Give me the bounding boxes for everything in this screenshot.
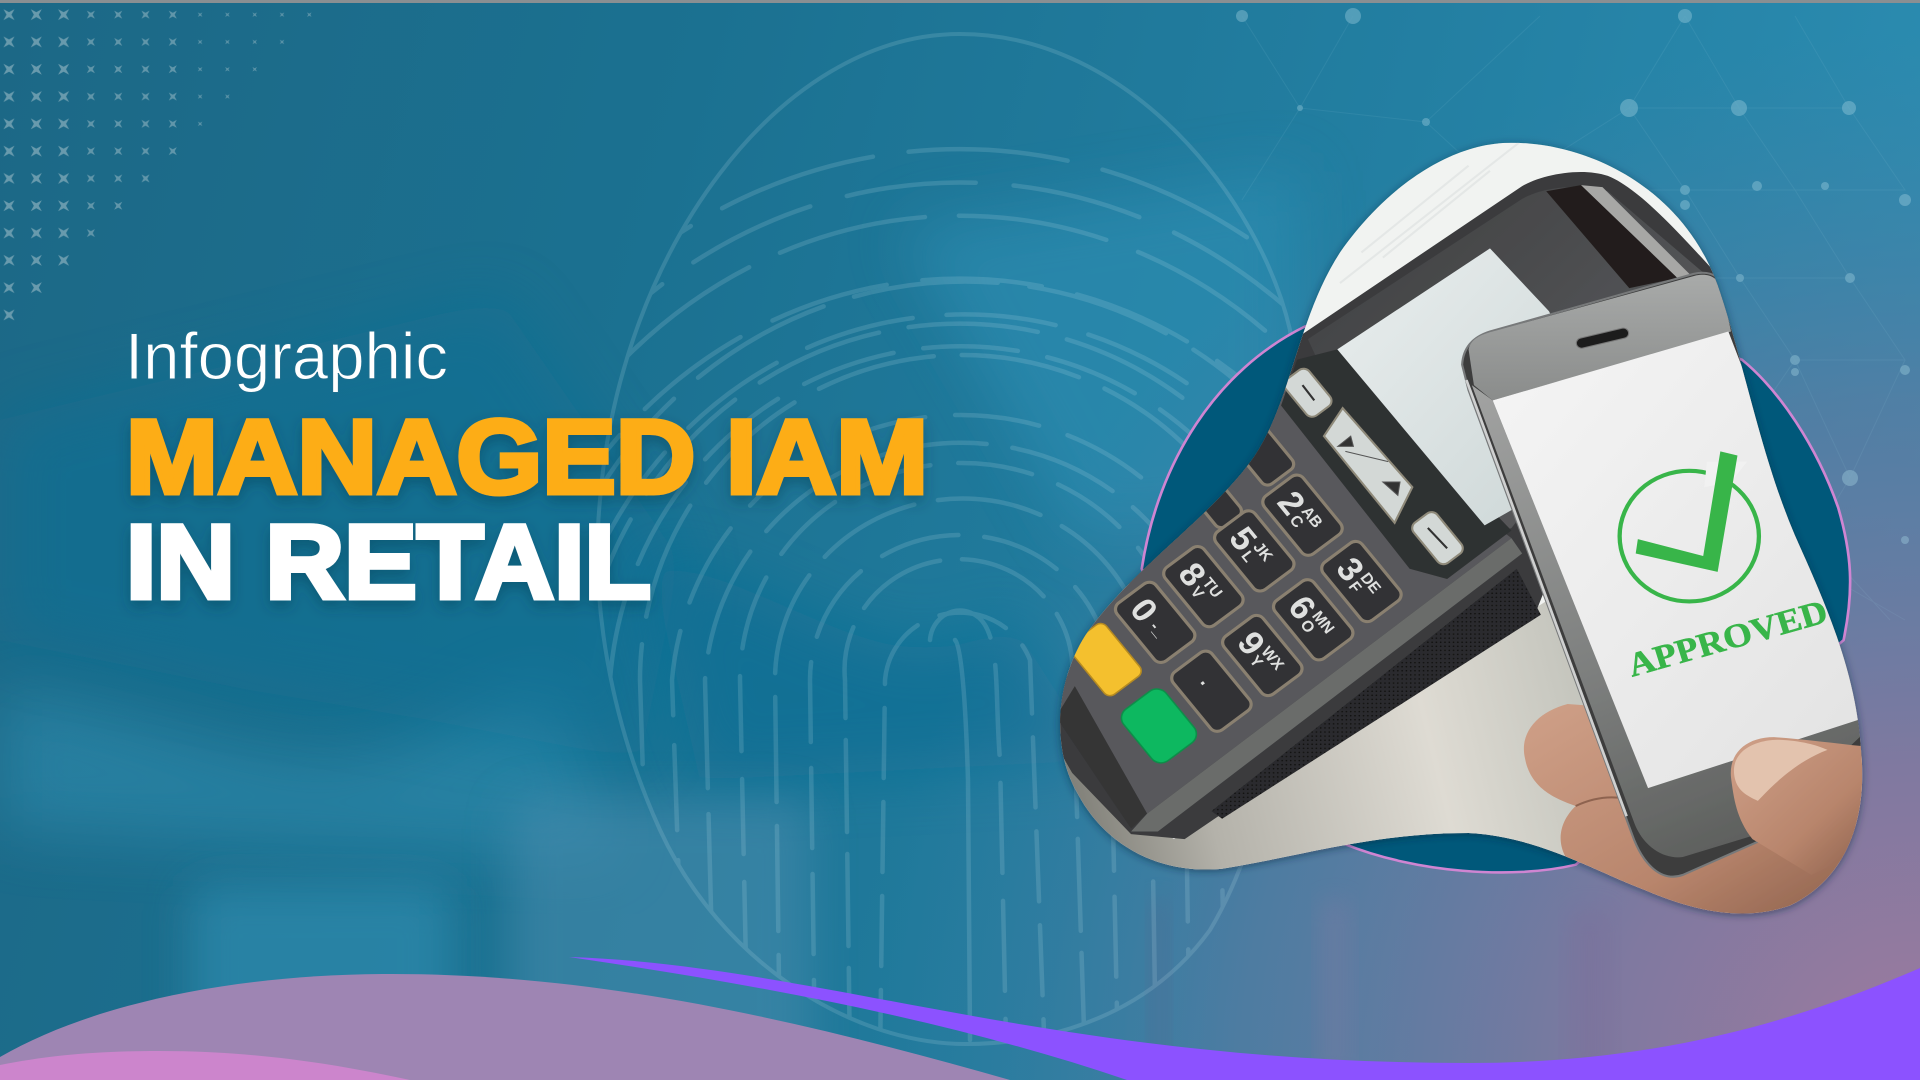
terminal number keys: 9: [1229, 625, 1272, 663]
terminal number keys: JK: [1249, 539, 1276, 565]
terminal number keys: 2: [1269, 485, 1312, 522]
network hexagon pattern: [1236, 8, 1911, 620]
terminal function keys: [1281, 366, 1466, 567]
terminal number keys: C: [1286, 512, 1307, 531]
yellow key: [1074, 622, 1142, 696]
photo blob: [1040, 130, 1897, 946]
phone speaker: [1575, 327, 1630, 349]
terminal number keys: F: [1345, 579, 1365, 597]
top edge strip: [0, 0, 1920, 3]
thumb: [1731, 737, 1876, 875]
terminal number keys: 3: [1328, 551, 1371, 589]
terminal number keys: O: [1296, 617, 1318, 637]
terminal number keys: L: [1237, 548, 1257, 566]
terminal number keys: Y: [1245, 653, 1266, 671]
terminal number keys: WX: [1257, 644, 1287, 674]
terminal number keys: MN: [1308, 608, 1337, 637]
thumbnail: [1734, 740, 1827, 801]
terminal number keys: .: [1196, 671, 1218, 689]
approved label: APPROVED: [1623, 593, 1832, 684]
eyebrow: Infographic: Infographic: [125, 319, 448, 393]
fingerprint background: [596, 32, 1292, 1046]
hero illustration: payment terminal and phone: [1040, 130, 1897, 946]
phone screen: [1493, 332, 1876, 788]
bottom wave: mauve: [0, 974, 1010, 1080]
table surface: [1060, 140, 1862, 915]
terminal number keys: 6: [1280, 589, 1323, 627]
terminal number keys: [1112, 417, 1405, 735]
terminal number keys: TU: [1198, 575, 1225, 601]
terminal number keys: 8: [1170, 556, 1213, 594]
dark blob with pink outline: [1142, 283, 1850, 872]
terminal body: [1040, 172, 1720, 839]
terminal number keys: DE: [1356, 570, 1384, 597]
bottom wave: pink: [0, 1051, 410, 1080]
hand behind phone: [1524, 704, 1876, 918]
terminal number keys: -_: [1146, 619, 1169, 640]
terminal number keys: 0: [1122, 592, 1165, 629]
decorative star dot grid: [4, 9, 312, 320]
title line 1: MANAGED IAM: MANAGED IAM: [126, 399, 928, 516]
bottom wave: violet: [569, 957, 1920, 1080]
phone: [1462, 273, 1886, 877]
terminal number keys: V: [1187, 584, 1207, 602]
green key: [1120, 688, 1198, 764]
terminal LCD screen: [1337, 248, 1550, 526]
approved check icon: [1620, 451, 1759, 601]
title line 2: IN RETAIL: IN RETAIL: [126, 504, 651, 621]
terminal number keys: 5: [1221, 520, 1264, 558]
terminal number keys: AB: [1297, 504, 1325, 531]
